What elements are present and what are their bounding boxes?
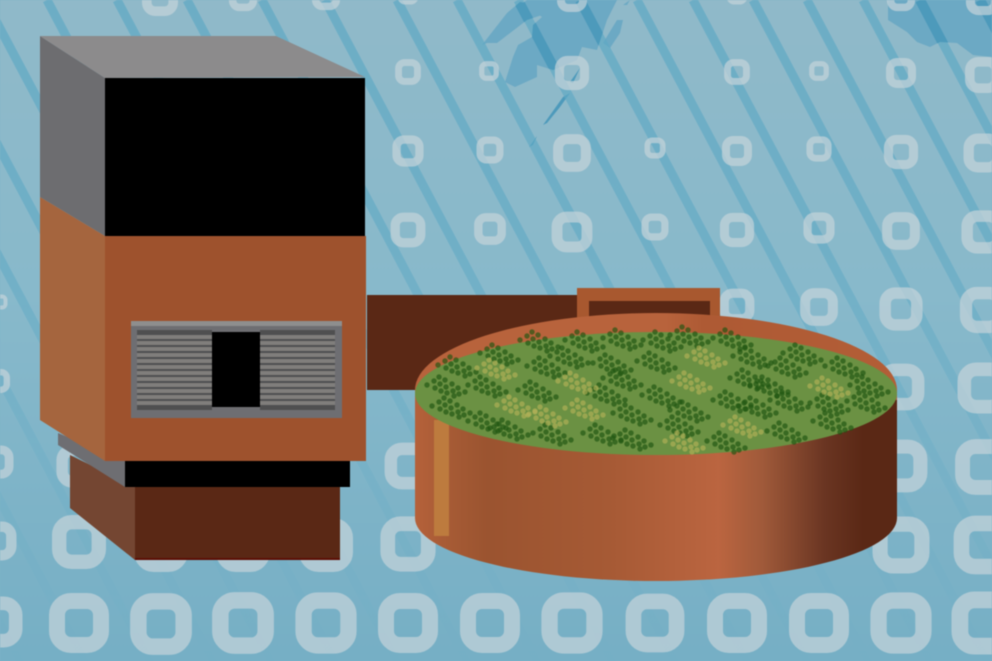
base block — [58, 433, 350, 560]
green surface — [415, 332, 897, 455]
vent panel with door — [131, 321, 342, 418]
dark algae clusters — [424, 324, 891, 455]
duct housing — [577, 288, 720, 328]
map shapes — [482, 0, 992, 147]
circular tank — [415, 313, 897, 581]
upper building — [40, 36, 366, 461]
connecting duct — [367, 295, 582, 390]
map stripe overlaps — [516, 0, 992, 70]
tank highlight — [434, 420, 449, 536]
yellow algae clusters — [474, 345, 851, 455]
